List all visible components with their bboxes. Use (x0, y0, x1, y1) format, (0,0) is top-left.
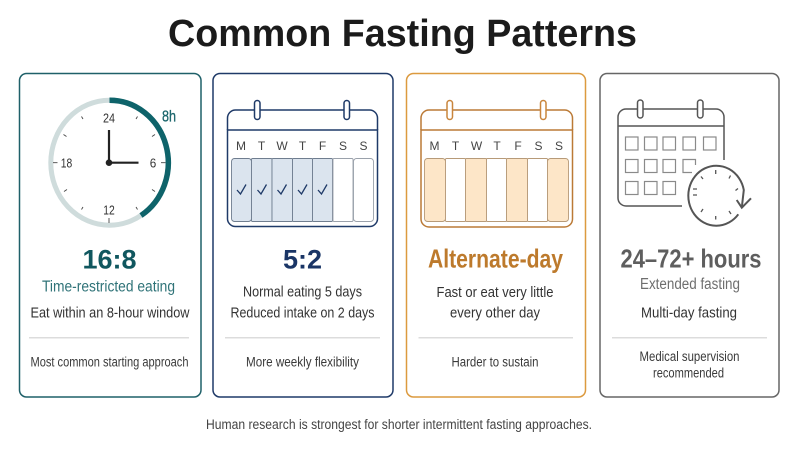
icon: weekly calendar with five checked days: S (359, 139, 368, 153)
icon: 24-hour clock: 18 (61, 156, 72, 170)
description (230, 285, 374, 322)
icon: weekly calendar with alternating days: F (514, 139, 522, 153)
icon: weekly calendar with alternating days: M (430, 139, 440, 153)
stat: 24–72+ hours: 24–72+ hours (620, 243, 762, 273)
footer note: Human research is strongest for shorter intermittent fasting approaches. (206, 417, 592, 432)
icon: 24-hour clock (51, 100, 176, 225)
icon: 24-hour clock: 6 (150, 156, 156, 170)
description: every other day (450, 306, 541, 322)
stat: 16:8: 16:8 (82, 244, 137, 274)
icon: weekly calendar with five checked days: T (258, 139, 266, 153)
description: Multi-day fasting (641, 306, 737, 322)
icon: 24-hour clock: 8h (162, 109, 176, 126)
icon: weekly calendar with alternating days: W (471, 139, 483, 153)
description: Fast or eat very little (436, 285, 554, 301)
note (640, 349, 740, 381)
panel: extended fasting (600, 74, 779, 397)
icon: weekly calendar with five checked days: F (319, 139, 326, 153)
icon: weekly calendar with alternating days: S (555, 139, 563, 153)
icon: 24-hour clock: 24 (103, 110, 115, 126)
panel: 5:2 (213, 74, 393, 397)
icon: weekly calendar with alternating days: T (493, 139, 501, 153)
description: Normal eating 5 days (243, 285, 362, 301)
icon: weekly calendar with five checked days: M (236, 139, 246, 153)
panel: alternate-day (406, 74, 586, 397)
icon: weekly calendar with five checked days (227, 100, 378, 227)
note: Harder to sustain (452, 355, 538, 370)
note: Most common starting approach (30, 355, 188, 370)
subtitle: Extended fasting (640, 276, 740, 293)
panel: 16:8 (20, 74, 201, 397)
title: Common Fasting Patterns (168, 13, 637, 55)
icon: 24-hour clock: 12 (103, 202, 115, 218)
icon: calendar with clock (618, 100, 751, 226)
icon: weekly calendar with alternating days: T (452, 139, 460, 153)
icon: weekly calendar with alternating days (421, 100, 572, 227)
description: Eat within an 8-hour window (30, 306, 190, 322)
stat: alternate-day: Alternate-day (428, 243, 563, 273)
note: More weekly flexibility (246, 355, 359, 370)
description (436, 285, 554, 322)
note: recommended (653, 366, 724, 381)
note: Medical supervision (640, 349, 740, 364)
icon: weekly calendar with alternating days: S (534, 139, 543, 153)
icon: weekly calendar with five checked days: T (299, 139, 307, 153)
icon: weekly calendar with five checked days: W (276, 139, 288, 153)
subtitle: Time-restricted eating (42, 278, 175, 296)
description: Reduced intake on 2 days (230, 306, 374, 322)
icon: weekly calendar with five checked days: S (339, 139, 347, 153)
stat: 5:2: 5:2 (283, 244, 322, 274)
